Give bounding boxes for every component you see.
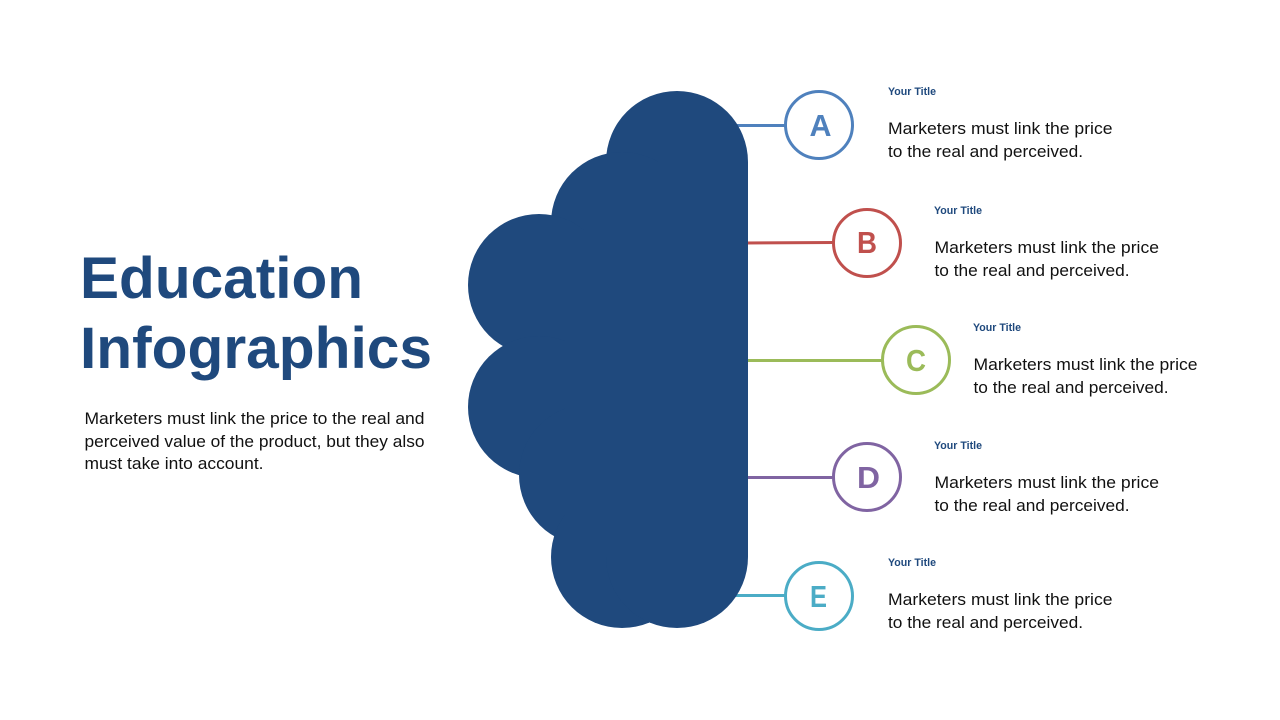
connector: B [745,241,834,244]
item text: E: Your Title [888,557,936,569]
item text: D: Your Title [934,440,982,452]
badge: B [834,210,900,276]
badge: C [882,326,950,394]
connector: E [730,594,786,597]
connector: A [730,124,786,127]
item text: E: to the real and perceived. [888,613,1083,632]
intro text block: perceived value of the product, but they also [84,432,424,451]
item text: B: Your Title [934,205,982,217]
badge: E: E [810,579,827,614]
badge: D [834,444,900,510]
badge: A [786,92,852,158]
item text: B [934,205,1159,280]
badge: C: C [906,343,926,378]
title: Infographics [80,316,432,381]
item text: A: Marketers must link the price [888,119,1112,138]
item text: B: to the real and perceived. [934,261,1130,280]
item text: C: Your Title [973,322,1021,334]
item text: C: Marketers must link the price [974,355,1198,374]
half-cloud head shape [468,91,748,628]
item text: B: Marketers must link the price [934,238,1159,257]
connector: C [745,359,884,362]
item text: C: to the real and perceived. [974,378,1168,397]
badge: B: B [857,225,877,260]
badge: E [786,562,852,630]
title [80,246,432,381]
item text: A [888,86,1112,161]
item text: A: to the real and perceived. [888,142,1083,161]
intro text block [84,409,424,473]
title: Education [80,246,363,311]
intro text block: Marketers must link the price to the real and [84,409,424,428]
badge: D: D [857,460,880,495]
connector: D [745,476,834,479]
item text: E [888,557,1112,632]
item text: C [973,322,1198,397]
badge: A: A [810,108,832,143]
item text: D: Marketers must link the price [934,473,1159,492]
item text: E: Marketers must link the price [888,590,1112,609]
item text: D [934,440,1159,515]
item text: D: to the real and perceived. [934,496,1130,515]
intro text block: must take into account. [84,454,264,473]
item text: A: Your Title [888,86,936,98]
